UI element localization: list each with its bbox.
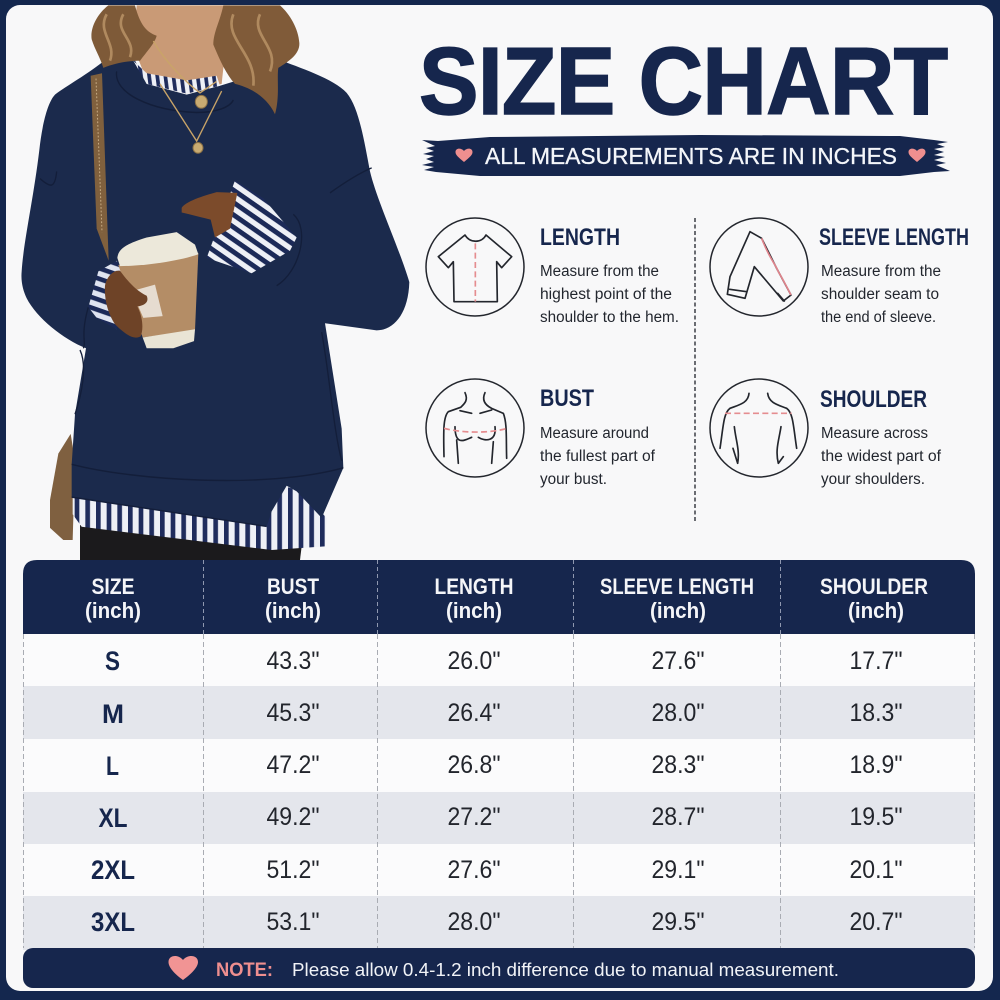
shoulder column (850, 647, 902, 936)
right hair (213, 5, 299, 114)
table header: (inch) (265, 598, 321, 623)
column dividers (24, 634, 974, 948)
coffee cup lid (117, 232, 198, 266)
sleeve length column (652, 647, 704, 936)
row backgrounds (23, 634, 975, 950)
shoulder column: 20.1" (850, 856, 902, 884)
sleeve length column: 28.0" (652, 699, 704, 727)
length column (448, 647, 500, 936)
table header: (inch) (650, 598, 706, 623)
pendants (193, 95, 207, 153)
shoulder column: 17.7" (850, 647, 902, 675)
table header: LENGTH (434, 574, 514, 599)
bust column: 47.2" (266, 751, 320, 779)
icon: shoulders (710, 379, 808, 477)
bust column: 53.1" (266, 908, 320, 936)
description: Measure around (540, 425, 649, 442)
icon: sleeve (710, 218, 808, 316)
shoulder column: 18.3" (850, 699, 902, 727)
neckline stripes (133, 61, 220, 94)
description: the widest part of (821, 448, 942, 465)
size column: S (105, 646, 120, 676)
note label: NOTE: (216, 960, 273, 981)
length column: 27.2" (448, 803, 500, 831)
note text: Please allow 0.4-1.2 inch difference due to manual measurement. (292, 960, 839, 980)
guide: shoulder (710, 379, 942, 488)
sleeve length column: 29.5" (652, 908, 704, 936)
table header: BUST (267, 574, 319, 599)
pointing hand (182, 192, 237, 237)
icon: t-shirt (426, 218, 524, 316)
sweatshirt folds (40, 71, 372, 526)
hair highlights (104, 14, 272, 86)
table header: (inch) (85, 598, 141, 623)
description: the fullest part of (540, 448, 656, 465)
sleeve length column: 27.6" (652, 647, 704, 675)
size column: M (102, 699, 124, 729)
length column: 28.0" (448, 908, 500, 936)
icon: bust (426, 379, 524, 477)
table header: (inch) (848, 598, 904, 623)
title: SIZE CHART (419, 27, 948, 135)
shoulder strap (91, 73, 109, 261)
sleeve length column: 28.7" (652, 803, 704, 831)
description: Measure across (821, 425, 928, 442)
icon: heart (168, 956, 198, 980)
length column: 27.6" (448, 856, 500, 884)
neck and chest (133, 5, 230, 94)
table header (23, 560, 975, 634)
size column: 2XL (91, 855, 135, 885)
heading: SHOULDER (820, 386, 927, 413)
heading: LENGTH (540, 224, 620, 251)
necklaces (153, 41, 222, 141)
strap stitching (96, 79, 102, 232)
left hair (91, 5, 157, 68)
photo: woman in navy sweatshirt with coffee (21, 5, 409, 560)
length column: 26.8" (448, 751, 500, 779)
brush stroke (422, 135, 950, 176)
length column: 26.4" (448, 699, 500, 727)
size column: XL (98, 803, 128, 833)
shoulder column: 19.5" (850, 803, 902, 831)
lower hand (105, 271, 147, 338)
shoulder column: 20.7" (850, 908, 902, 936)
right cuff stripes (207, 180, 297, 273)
bust column: 45.3" (266, 699, 320, 727)
guide: length (426, 218, 679, 326)
description: the end of sleeve. (821, 309, 936, 326)
size table (23, 560, 975, 950)
description: Measure from the (821, 263, 941, 280)
table header: SLEEVE LENGTH (600, 574, 754, 599)
sweatshirt (21, 57, 409, 526)
size column: L (106, 751, 119, 781)
description: shoulder seam to (821, 286, 939, 303)
bust column (266, 647, 320, 936)
heart right (908, 149, 926, 162)
handbag (50, 434, 75, 540)
heart left (456, 149, 472, 162)
description: your shoulders. (821, 471, 925, 488)
table header: SIZE (92, 574, 134, 599)
cup label (132, 285, 163, 318)
guide: bust (426, 379, 656, 488)
table header: SHOULDER (820, 574, 928, 599)
guide: sleeve length (710, 218, 969, 326)
sleeve length column: 29.1" (652, 856, 704, 884)
shoulder column: 18.9" (850, 751, 902, 779)
bust column: 43.3" (266, 647, 320, 675)
description: your bust. (540, 471, 607, 488)
pants (80, 525, 302, 560)
table header: (inch) (446, 598, 502, 623)
header column dividers (204, 560, 780, 634)
size column: 3XL (91, 907, 135, 937)
description: shoulder to the hem. (540, 309, 679, 326)
layered shirt hem stripes (73, 486, 327, 550)
banner: all measurements in inches (422, 135, 950, 176)
banner text: ALL MEASUREMENTS ARE IN INCHES (485, 143, 897, 169)
heading: BUST (540, 385, 594, 412)
length column: 26.0" (448, 647, 500, 675)
coffee cup bottom (143, 329, 195, 348)
dashed divider between guides (694, 218, 696, 522)
description: Measure from the (540, 263, 659, 280)
description: highest point of the (540, 286, 672, 303)
size column (91, 646, 135, 937)
bust column: 49.2" (266, 803, 320, 831)
coffee cup sleeve (118, 253, 198, 337)
left cuff stripes (88, 261, 127, 329)
note bar (23, 948, 975, 988)
sleeve length column: 28.3" (652, 751, 704, 779)
bust column: 51.2" (266, 856, 320, 884)
